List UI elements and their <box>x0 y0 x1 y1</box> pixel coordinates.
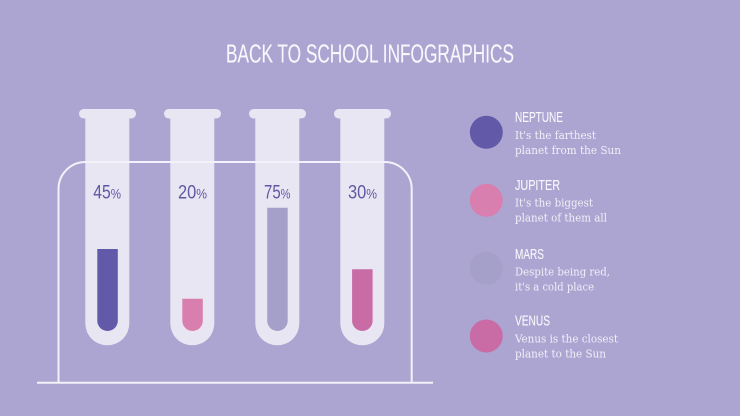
test tube: Jupiter 20%: 20% <box>178 182 207 203</box>
chart: test tubes in rack <box>37 109 433 383</box>
legend: Neptune: NEPTUNE <box>515 109 563 126</box>
legend: Venus: planet to the Sun <box>515 346 607 360</box>
legend: Jupiter: JUPITER <box>515 177 560 194</box>
legend: Venus: VENUS <box>515 313 550 330</box>
legend: Mars: MARS <box>515 246 544 263</box>
legend: Neptune: It's the farthest <box>515 128 596 142</box>
test tube: Neptune 45% <box>79 109 136 345</box>
legend: Jupiter: It's the biggest <box>515 196 593 210</box>
test tube: Venus 30%: 30% <box>348 182 377 203</box>
icon: Mars dot <box>470 252 503 285</box>
legend: Jupiter <box>470 177 607 225</box>
legend: Mars: it's a cold place <box>515 280 594 294</box>
legend: Neptune: planet from the Sun <box>515 143 622 157</box>
icon: Venus dot <box>470 320 503 352</box>
legend: Mars <box>470 246 610 294</box>
legend: Neptune <box>470 109 622 157</box>
title: BACK TO SCHOOL INFOGRAPHICS <box>226 38 514 68</box>
legend: Jupiter: planet of them all <box>515 211 607 225</box>
legend: Venus <box>470 313 618 360</box>
legend: Mars: Despite being red, <box>515 265 610 279</box>
icon: Jupiter dot <box>470 184 503 217</box>
legend: Venus: Venus is the closest <box>514 331 618 345</box>
test tube: Venus 30% <box>334 109 391 345</box>
rack frame <box>37 162 433 383</box>
test tube: Mars 75%: 75% <box>264 182 290 203</box>
test tube: Jupiter 20% <box>164 109 221 345</box>
test tube: Neptune 45%: 45% <box>93 182 121 203</box>
icon: Neptune dot <box>470 116 503 149</box>
test tube: Mars 75% <box>249 109 306 345</box>
